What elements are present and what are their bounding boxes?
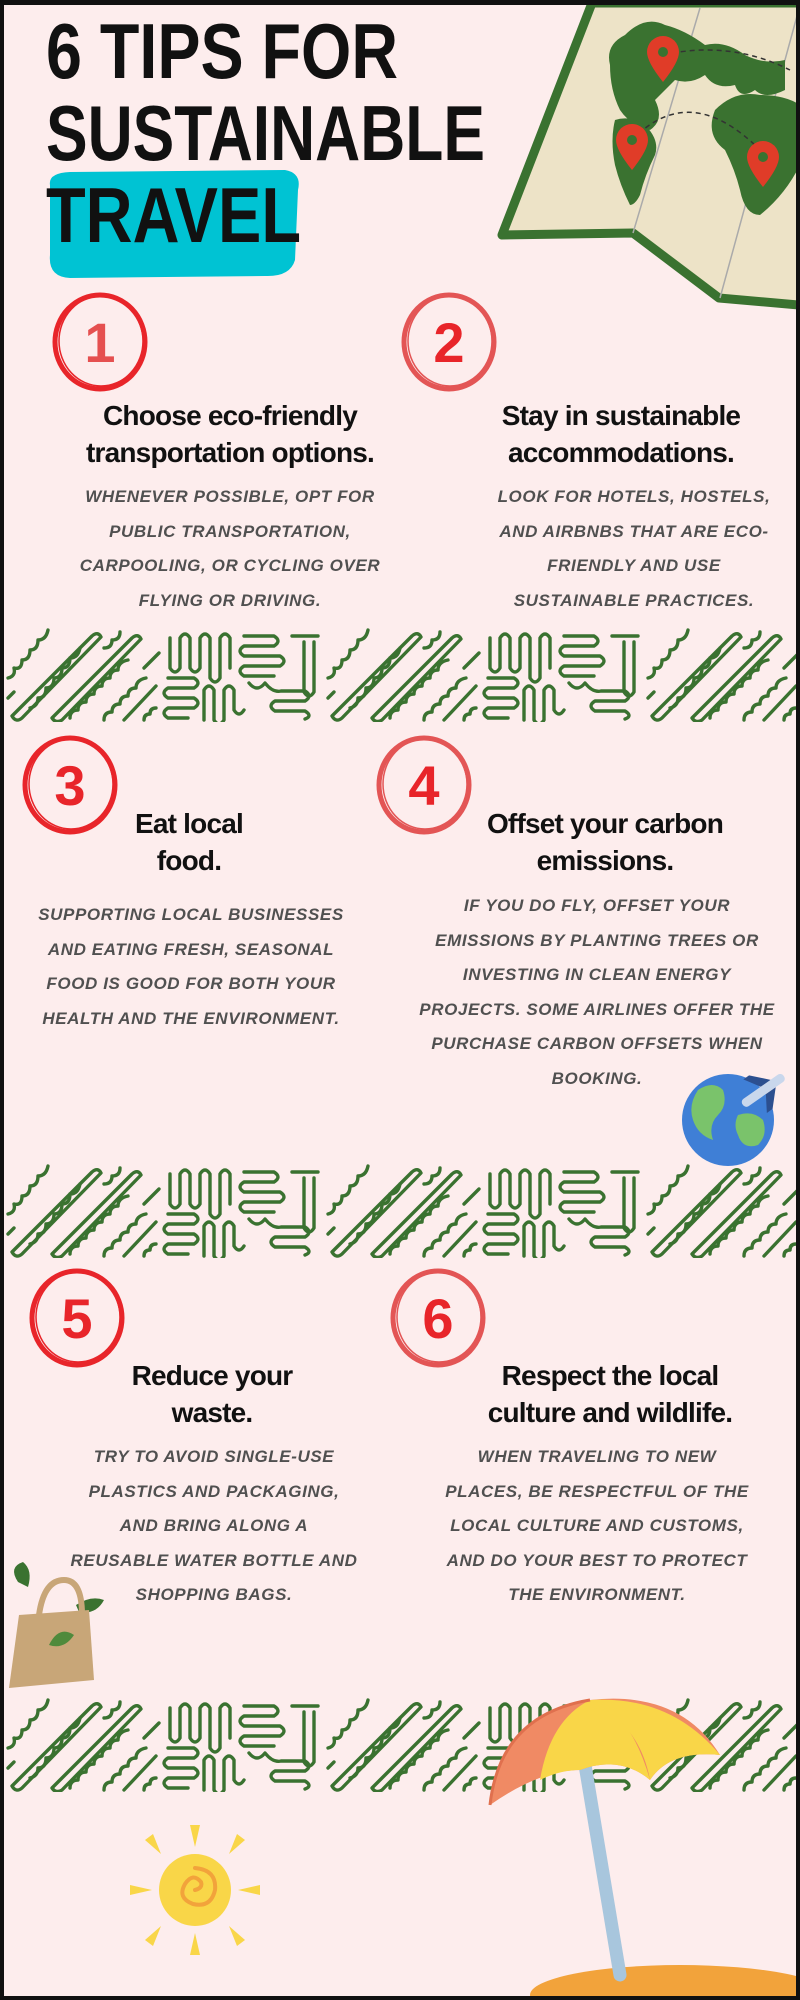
body 6: AND DO YOUR BEST TO PROTECT [447,1550,747,1570]
body 6: WHEN TRAVELING TO NEW [478,1447,716,1466]
body 1: WHENEVER POSSIBLE, OPT FOR [85,487,375,506]
heading 4: emissions. [537,845,673,876]
number badge 1: 1 [84,311,116,374]
number badge 1 [52,292,148,392]
heading 2 [502,400,740,468]
heading 1 [86,400,374,468]
icon: world map [498,5,796,310]
icon: globe with plane [682,1074,785,1166]
icon: sun [130,1825,260,1955]
number badge 2: 2 [433,311,465,374]
body 4: IF YOU DO FLY, OFFSET YOUR [464,896,730,915]
icon: shopping bag [9,1562,104,1688]
body 5: AND BRING ALONG A [120,1516,308,1535]
heading 3: food. [157,845,221,876]
number badge 6 [390,1268,486,1368]
title: TRAVEL [46,171,301,259]
body 2: SUSTAINABLE PRACTICES. [514,590,754,610]
heading 4 [487,808,723,876]
body 5: PLASTICS AND PACKAGING, [89,1482,339,1500]
heading 6 [488,1360,732,1428]
number badge 3 [22,736,118,834]
number badge 2 [402,292,496,392]
body 5: SHOPPING BAGS. [136,1585,292,1604]
number badge 5 [30,1268,124,1368]
body 3: SUPPORTING LOCAL BUSINESSES [38,905,344,924]
body 4: INVESTING IN CLEAN ENERGY [463,965,731,984]
body 3: FOOD IS GOOD FOR BOTH YOUR [46,974,336,993]
body 5 [70,1447,358,1604]
number badge 4: 4 [408,754,440,817]
body 1: FLYING OR DRIVING. [139,590,321,610]
number badge 4 [376,736,472,834]
number badge 6: 6 [422,1287,454,1350]
title highlight box [50,170,299,278]
body 4: BOOKING. [552,1068,642,1088]
heading 5 [132,1360,293,1428]
heading 3: Eat local [135,808,243,839]
body 3 [38,905,344,1028]
heading 3 [135,808,243,876]
body 3: AND EATING FRESH, SEASONAL [48,940,334,958]
body 1: CARPOOLING, OR CYCLING OVER [80,556,380,575]
body 2: FRIENDLY AND USE [547,556,721,575]
number badge 5: 5 [61,1287,93,1350]
number badge 3: 3 [54,754,86,817]
heading 5: Reduce your [132,1360,292,1391]
body 5: TRY TO AVOID SINGLE-USE [94,1447,334,1466]
pattern band 1 [6,628,796,722]
body 1 [80,487,380,610]
heading 1: Choose eco-friendly [103,400,357,431]
heading 4: Offset your carbon [487,808,723,839]
icon: beach umbrella [488,1698,796,1996]
heading 5: waste. [172,1397,252,1428]
body 4: PURCHASE CARBON OFFSETS WHEN [431,1034,763,1053]
heading 2: Stay in sustainable [502,400,740,431]
body 6 [445,1447,749,1604]
body 4 [419,896,775,1088]
heading 6: culture and wildlife. [488,1397,732,1428]
body 6: THE ENVIRONMENT. [508,1585,686,1604]
body 4: PROJECTS. SOME AIRLINES OFFER THE [419,1000,775,1018]
body 5: REUSABLE WATER BOTTLE AND [70,1550,358,1570]
pattern band 2 [6,1164,796,1258]
body 1: PUBLIC TRANSPORTATION, [109,522,351,540]
body 2 [498,487,770,610]
body 6: LOCAL CULTURE AND CUSTOMS, [450,1516,744,1535]
body 6: PLACES, BE RESPECTFUL OF THE [445,1482,749,1500]
title [46,15,485,278]
pattern band 3 [6,1698,796,1792]
body 3: HEALTH AND THE ENVIRONMENT. [42,1008,340,1028]
heading 1: transportation options. [86,437,374,468]
body 4: EMISSIONS BY PLANTING TREES OR [435,930,759,950]
heading 6: Respect the local [502,1360,718,1391]
heading 2: accommodations. [508,437,734,468]
body 2: LOOK FOR HOTELS, HOSTELS, [498,487,770,506]
body 2: AND AIRBNBS THAT ARE ECO- [499,522,769,540]
